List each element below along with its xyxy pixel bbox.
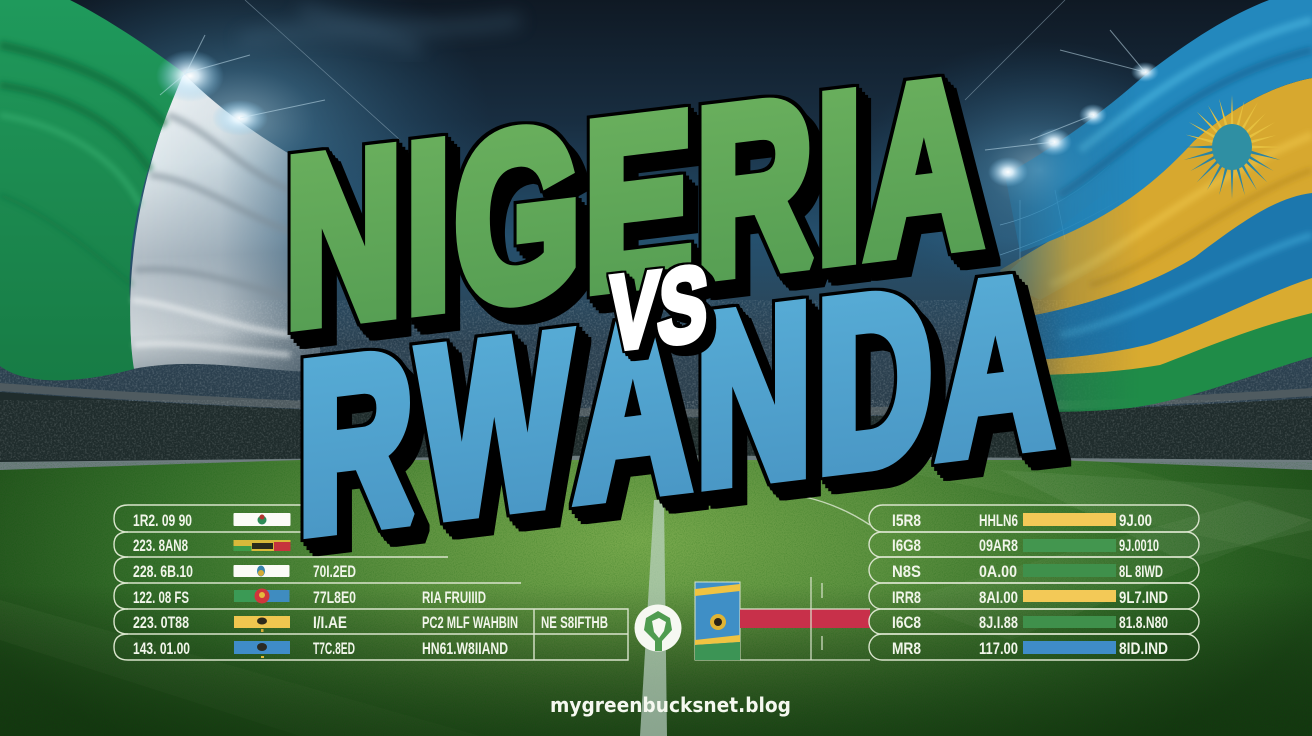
- row 4: [133, 588, 486, 607]
- row 5: 223. 0T88: [133, 613, 189, 632]
- flag folds: [1050, 20, 1312, 335]
- row 5: 8J.I.88: [979, 613, 1018, 632]
- background: stadium stands: [0, 270, 1312, 470]
- row 1: [133, 511, 290, 530]
- floodlight glare left: [156, 35, 325, 136]
- row 3: [869, 557, 1199, 583]
- row 2: I6G8: [892, 536, 921, 555]
- row 2: 09AR8: [979, 536, 1018, 555]
- flag folds: [0, 45, 300, 355]
- row 4: 8AI.00: [979, 588, 1018, 607]
- row 5: I/I.AE: [313, 613, 347, 632]
- row 3: 0A.00: [979, 562, 1017, 581]
- title: Rwanda: RWANDA: [298, 225, 1058, 584]
- row 4: 9L7.IND: [1119, 588, 1168, 607]
- row 1: 9J.00: [1119, 511, 1152, 530]
- title: Nigeria: NIGERIA: [285, 27, 986, 375]
- row 6: T7C.8ED: [313, 639, 355, 658]
- flag band: green: [0, 0, 184, 380]
- row 3: 8L 8IWD: [1119, 562, 1163, 581]
- row 4: [869, 583, 1199, 609]
- row 6: 117.00: [979, 639, 1018, 658]
- Nigeria flag: [0, 0, 320, 380]
- row 5: [869, 609, 1199, 634]
- row 4: RIA FRUIIID: [422, 588, 486, 607]
- row 4: IRR8: [892, 588, 921, 607]
- row 4: 122. 08 FS: [133, 588, 189, 607]
- footer website: mygreenbucksnet.blog: [550, 693, 791, 717]
- row 6: HN61.W8IIAND: [422, 639, 508, 658]
- row 6: MR8: [892, 639, 921, 658]
- row 4: 77L8E0: [313, 588, 356, 607]
- icon: Rwanda sun: [1182, 95, 1282, 199]
- row 6: 143. 01.00: [133, 639, 190, 658]
- red bar with center lines: [740, 577, 870, 660]
- table outlines: [114, 505, 628, 660]
- row 2: 9J.0010: [1119, 536, 1159, 555]
- Rwanda flag: [1000, 0, 1312, 412]
- right results table: [869, 505, 1199, 660]
- background: night sky: [0, 0, 1312, 340]
- row 1: 1R2. 09 90: [133, 511, 192, 530]
- row 5: [133, 613, 608, 632]
- row 3: 70I.2ED: [313, 562, 356, 581]
- row 3: 228. 6B.10: [133, 562, 193, 581]
- row 5: 81.8.N80: [1119, 613, 1168, 632]
- row 3: N8S: [892, 562, 921, 581]
- row 1: I5R8: [892, 511, 921, 530]
- left results table: [114, 505, 628, 660]
- row 5: I6C8: [892, 613, 921, 632]
- row 6: [869, 634, 1199, 660]
- row 5: PC2 MLF WAHBIN: [422, 613, 518, 632]
- center badge icon: [634, 604, 682, 652]
- flag band: green: [1050, 313, 1312, 412]
- center flag graphic: [695, 582, 740, 660]
- row 2: [133, 536, 290, 555]
- flag band: upper blue: [1005, 0, 1312, 252]
- row 1: [869, 505, 1199, 532]
- row 1: HHLN6: [979, 511, 1018, 530]
- row 6: [133, 639, 508, 658]
- flag band: lower yellow: [1046, 278, 1312, 375]
- row 6: 8ID.IND: [1119, 639, 1168, 658]
- row 3: [133, 562, 356, 581]
- row 5: NE S8IFTHB: [541, 613, 608, 632]
- title: vs: VS: [606, 244, 711, 373]
- flag band: lower blue: [1020, 193, 1312, 360]
- flag band: upper yellow: [1000, 78, 1312, 318]
- row 2: [869, 532, 1199, 557]
- row 2: 223. 8AN8: [133, 536, 188, 555]
- flag band: white: [130, 73, 320, 372]
- floodlight glare right: [985, 30, 1159, 187]
- background: pitch: [0, 460, 1312, 736]
